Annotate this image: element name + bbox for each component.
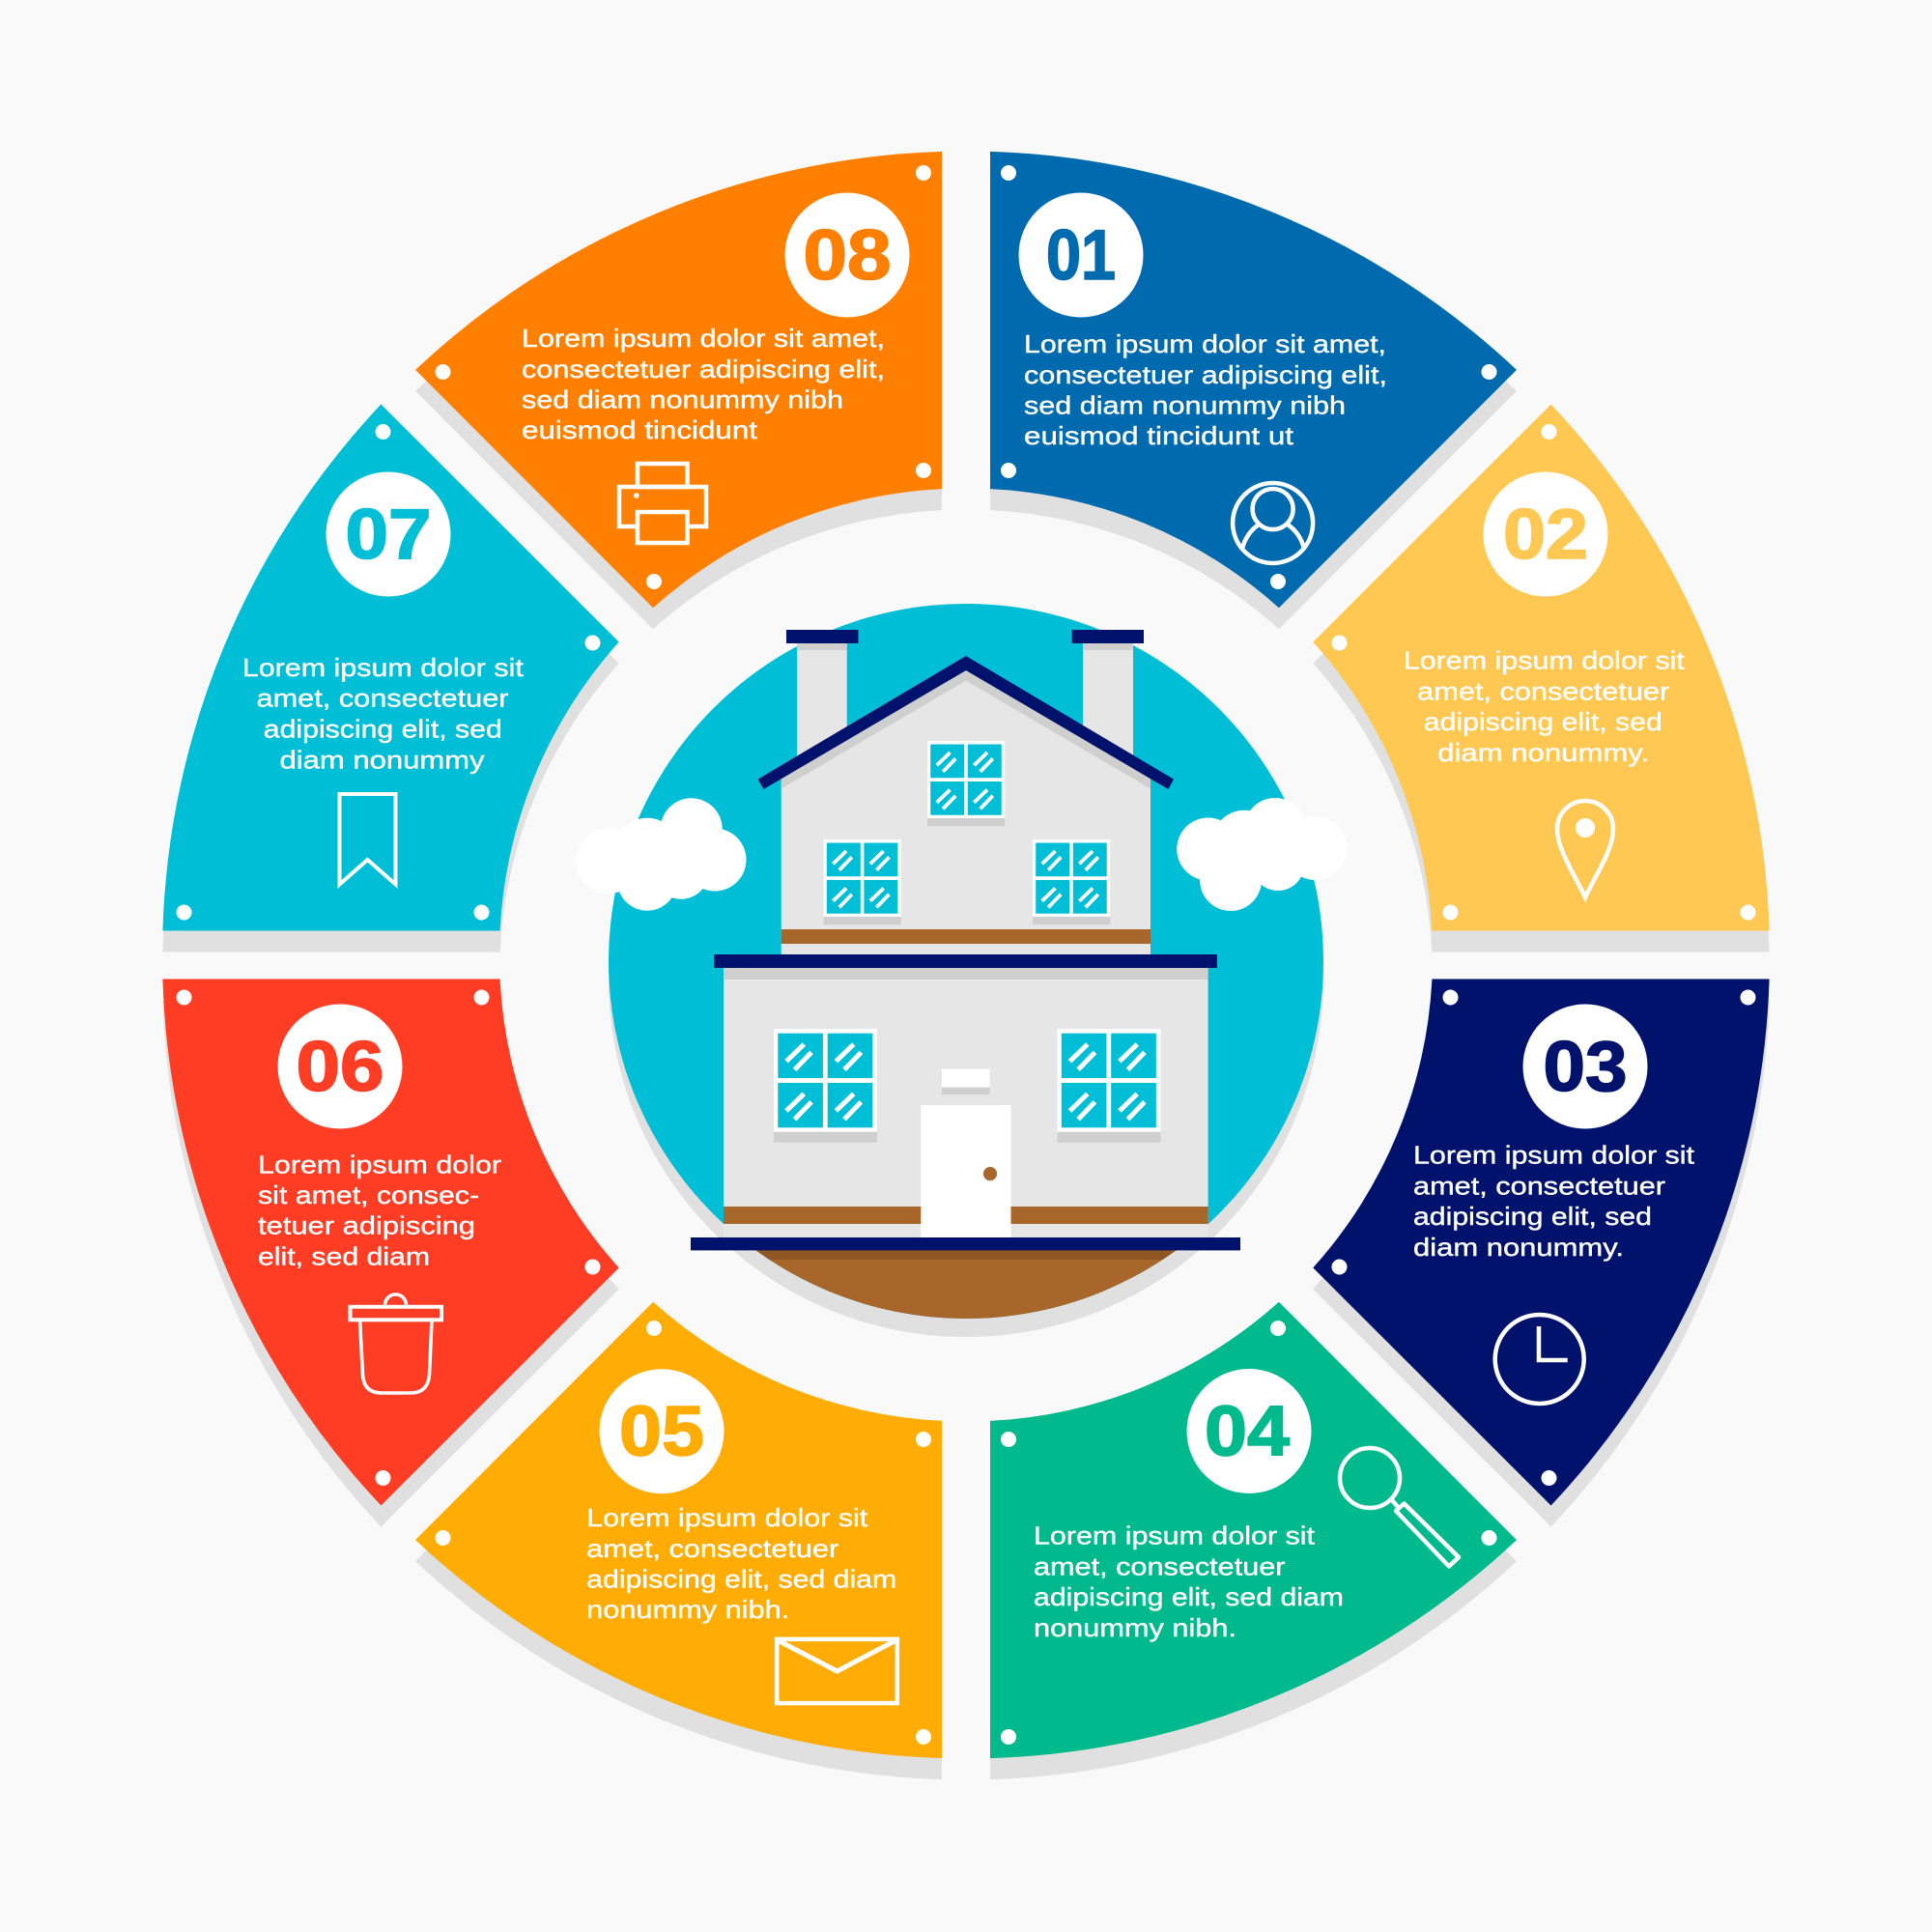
text 02: adipiscing elit, sed [1424, 707, 1662, 736]
icon: clock [1495, 1315, 1584, 1404]
number badge 05 [599, 1369, 724, 1493]
text 06: tetuer adipiscing [258, 1211, 475, 1240]
number badge 06 [278, 1005, 402, 1128]
text 08: sed diam nonummy nibh [522, 384, 843, 413]
text 03: adipiscing elit, sed [1413, 1202, 1652, 1231]
text 05 [586, 1503, 896, 1624]
roof [758, 656, 1174, 789]
text 03: amet, consectetuer [1413, 1172, 1665, 1201]
lower roof shadow [724, 968, 1208, 980]
icon: printer [619, 464, 706, 543]
text 06: elit, sed diam [258, 1241, 430, 1270]
icon: envelope [777, 1639, 897, 1703]
text 04: adipiscing elit, sed diam [1034, 1582, 1344, 1611]
icon: trash bin [350, 1294, 441, 1393]
text 07: adipiscing elit, sed [264, 715, 502, 744]
text 01: Lorem ipsum dolor sit amet, [1024, 329, 1386, 358]
number badge 03: 03 [1544, 1028, 1627, 1106]
chimney right [1072, 630, 1144, 769]
panel 08: orange [415, 152, 942, 629]
icon: map pin [1557, 801, 1613, 897]
text 07 [242, 653, 525, 774]
lower brown band [724, 1207, 1208, 1224]
panel 05: amber [415, 1302, 942, 1779]
text 08: Lorem ipsum dolor sit amet, [522, 324, 885, 353]
roof shadow [781, 670, 1151, 788]
text 08: euismod tincidunt [522, 415, 758, 444]
door light [942, 1069, 990, 1094]
text 05: adipiscing elit, sed diam [586, 1565, 896, 1594]
panel 01: blue [990, 152, 1517, 629]
base plank [691, 1237, 1240, 1250]
panel 02: yellow [1313, 404, 1770, 952]
chimney left [786, 630, 858, 769]
number badge 01: 01 [1046, 216, 1116, 295]
number badge 08 [784, 193, 910, 317]
number badge 01 [1018, 193, 1144, 317]
lower window right [1057, 1029, 1161, 1143]
text 02: Lorem ipsum dolor sit [1404, 646, 1686, 675]
text 07: amet, consectetuer [257, 684, 509, 713]
text 01: consectetuer adipiscing elit, [1024, 360, 1387, 389]
panel 07: cyan [162, 404, 619, 952]
cloud left [576, 798, 746, 911]
text 06: Lorem ipsum dolor [258, 1150, 501, 1179]
text 02: diam nonummy. [1437, 738, 1649, 767]
lower window left [774, 1029, 877, 1143]
panel 03: navy [1313, 980, 1770, 1526]
upper storey wall [781, 670, 1151, 954]
text 04 [1034, 1521, 1344, 1642]
lower storey wall [724, 968, 1208, 1237]
upper window right [1033, 839, 1110, 924]
number badge 08: 08 [804, 216, 891, 295]
icon: magnifier [1340, 1448, 1459, 1567]
central illustration: house [576, 604, 1348, 1337]
number badge 04 [1186, 1369, 1312, 1493]
text 03: diam nonummy. [1413, 1233, 1624, 1262]
number badge 02 [1484, 471, 1607, 597]
number badge 07: 07 [346, 496, 431, 574]
cloud right [1177, 798, 1348, 911]
text 04: nonummy nibh. [1034, 1613, 1236, 1642]
text 04: amet, consectetuer [1034, 1551, 1286, 1580]
panel 04: green [990, 1302, 1517, 1779]
text 05: amet, consectetuer [586, 1534, 839, 1563]
number badge 07 [327, 471, 450, 597]
text 06 [258, 1150, 501, 1270]
text 03 [1413, 1141, 1695, 1262]
middle roof plank [714, 954, 1217, 968]
text 01: sed diam nonummy nibh [1024, 390, 1346, 419]
upper brown band [781, 929, 1151, 944]
icon: user [1233, 483, 1313, 563]
number badge 05: 05 [619, 1393, 704, 1471]
text 06: sit amet, consec- [258, 1180, 479, 1209]
text 02 [1404, 646, 1686, 767]
text 04: Lorem ipsum dolor sit [1034, 1521, 1316, 1550]
ground [755, 1250, 1177, 1319]
panel 06: red [162, 980, 619, 1526]
door [921, 1105, 1010, 1237]
upper window left [824, 839, 901, 924]
sky circle with shadow [609, 604, 1323, 1337]
text 08: consectetuer adipiscing elit, [522, 355, 885, 384]
text 05: nonummy nibh. [586, 1595, 789, 1624]
upper window top [927, 741, 1005, 826]
text 07: diam nonummy [280, 745, 485, 774]
text 07: Lorem ipsum dolor sit [242, 653, 525, 682]
number badge 03 [1522, 1005, 1648, 1128]
text 08 [522, 324, 885, 444]
text 01: euismod tincidunt ut [1024, 421, 1294, 450]
text 01 [1024, 329, 1387, 450]
number badge 06: 06 [296, 1028, 384, 1106]
icon: bookmark [340, 794, 396, 885]
number badge 04: 04 [1205, 1393, 1290, 1470]
text 05: Lorem ipsum dolor sit [586, 1503, 868, 1532]
text 03: Lorem ipsum dolor sit [1413, 1141, 1695, 1170]
number badge 02: 02 [1503, 496, 1588, 574]
text 02: amet, consectetuer [1417, 676, 1670, 705]
